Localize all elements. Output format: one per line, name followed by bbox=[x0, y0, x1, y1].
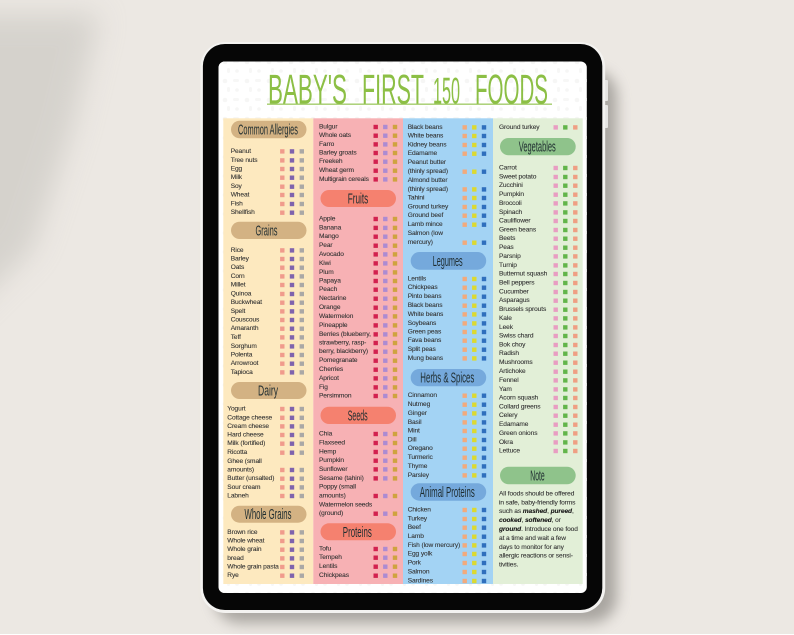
heading: herbs and spices: Herbs & Spices bbox=[420, 371, 474, 387]
heading: common allergies: Common Allergies bbox=[238, 122, 298, 138]
list: nuts and meats: Tahini bbox=[408, 194, 425, 202]
list: grains continued: Farro bbox=[319, 141, 335, 148]
heading: animal proteins bbox=[411, 483, 486, 501]
list: animal proteins: Beef bbox=[408, 524, 421, 531]
list: animal proteins bbox=[408, 506, 486, 584]
list: vegetables: Carrot bbox=[499, 164, 517, 172]
list: nuts and meats: Black beans bbox=[408, 124, 443, 131]
list: proteins bbox=[319, 546, 397, 579]
list: fruits: Papaya bbox=[319, 278, 341, 284]
list: dairy: Butter (unsalted) bbox=[227, 475, 274, 482]
list: animal proteins: Egg yolk bbox=[408, 550, 433, 558]
note text: in safe, baby-friendly forms bbox=[499, 500, 576, 506]
list: common allergies: Wheat bbox=[231, 192, 250, 198]
list: herbs and spices: Oregano bbox=[408, 445, 433, 452]
list: grains: Corn bbox=[231, 273, 245, 280]
list: legumes: Green peas bbox=[408, 328, 442, 336]
list: fruits: Avocado bbox=[319, 251, 344, 258]
list: nuts and meats: Edamame bbox=[408, 150, 437, 157]
heading: dairy: Dairy bbox=[258, 384, 278, 400]
title bbox=[267, 66, 552, 113]
list: vegetables: Lettuce bbox=[499, 448, 520, 454]
list: common allergies: Tree nuts bbox=[231, 157, 258, 164]
list: nuts and meats: (thinly spread) bbox=[408, 168, 448, 175]
list: grains continued: Whole oats bbox=[319, 132, 352, 139]
list: proteins: Tempeh bbox=[319, 554, 342, 561]
list: nuts and meats bbox=[408, 124, 486, 246]
list: common allergies bbox=[231, 148, 304, 216]
list: dairy: Ghee (small bbox=[227, 458, 262, 465]
list: dairy: Cream cheese bbox=[227, 423, 269, 430]
tablet screen bbox=[218, 62, 587, 593]
list: dairy: Ricotta bbox=[227, 449, 248, 456]
note text: allergic reactions or sensi- bbox=[499, 553, 573, 560]
list: herbs and spices: Ginger bbox=[408, 410, 428, 417]
heading: herbs and spices bbox=[411, 369, 486, 387]
list: vegetables: Green onions bbox=[499, 430, 538, 437]
list: common allergies: Shellfish bbox=[231, 209, 255, 216]
list: grains continued: Barley groats bbox=[319, 150, 357, 156]
heading: grains bbox=[231, 222, 306, 239]
list: legumes: Pinto beans bbox=[408, 293, 442, 300]
list: dairy: Labneh bbox=[227, 492, 249, 500]
list: vegetables: Cauliflower bbox=[499, 218, 531, 224]
title: 150 bbox=[433, 71, 460, 112]
list: dairy: Sour cream bbox=[227, 484, 261, 491]
list: legumes: Fava beans bbox=[408, 337, 442, 344]
list: nuts and meats: mercury) bbox=[408, 239, 433, 246]
heading: common allergies bbox=[231, 121, 306, 138]
list: nuts and meats: Almond butter bbox=[408, 177, 448, 184]
list: herbs and spices: Mint bbox=[408, 428, 420, 434]
list: fruits: Apricot bbox=[319, 375, 339, 382]
heading: proteins bbox=[320, 523, 396, 541]
list: vegetables: Bell peppers bbox=[499, 280, 535, 286]
list: nuts and meats: Kidney beans bbox=[408, 142, 447, 148]
list: whole grains: Whole grain bbox=[227, 546, 262, 553]
heading: fruits: Fruits bbox=[348, 192, 368, 208]
heading: grains: Grains bbox=[256, 223, 278, 239]
list: grains bbox=[231, 247, 304, 376]
list: herbs and spices: Basil bbox=[408, 419, 422, 426]
list: vegetables: Celery bbox=[499, 412, 518, 419]
list: common allergies: Peanut bbox=[231, 148, 251, 155]
panel: green column bbox=[493, 118, 583, 584]
list: seeds: Sesame (tahini) bbox=[319, 475, 364, 482]
list: fruits: Orange bbox=[319, 304, 341, 311]
heading: legumes bbox=[411, 252, 486, 270]
list: vegetables: Beets bbox=[499, 235, 516, 242]
list: whole grains: Rye bbox=[227, 572, 239, 579]
heading: fruits bbox=[320, 190, 396, 208]
list: vegetables: Cucumber bbox=[499, 288, 530, 296]
list: legumes bbox=[408, 276, 486, 362]
list: herbs and spices: Parsley bbox=[408, 472, 430, 479]
heading: whole grains: Whole Grains bbox=[244, 507, 292, 523]
note text: ground. Introduce one food bbox=[498, 526, 578, 533]
heading: legumes: Legumes bbox=[433, 254, 463, 270]
list: vegetables: Turnip bbox=[499, 262, 517, 269]
list: animal proteins: Pork bbox=[408, 560, 422, 566]
list: fruits: strawberry, rasp- bbox=[319, 340, 366, 346]
list: nuts and meats: Lamb mince bbox=[408, 221, 443, 228]
list: vegetables: Edamame bbox=[499, 421, 529, 428]
list: animal proteins: Lamb bbox=[408, 533, 424, 540]
list: animal proteins: Salmon bbox=[408, 568, 430, 576]
list: nuts and meats: Peanut butter bbox=[408, 159, 447, 166]
list: grains: Millet bbox=[231, 282, 246, 288]
list: seeds: Sunflower bbox=[319, 466, 348, 473]
heading: vegetables: Vegetables bbox=[519, 140, 556, 156]
list: seeds: Pumpkin bbox=[319, 457, 344, 464]
list: vegetables: Swiss chard bbox=[499, 332, 534, 340]
list: fruits: Berries (blueberry, bbox=[319, 331, 371, 338]
list: common allergies: Fish bbox=[231, 200, 243, 208]
list: herbs and spices bbox=[408, 392, 486, 479]
heading: proteins: Proteins bbox=[343, 525, 372, 541]
list: fruits: Peach bbox=[319, 286, 338, 293]
list: animal proteins: Sardines bbox=[408, 578, 434, 584]
list: proteins: Tofu bbox=[319, 546, 331, 552]
list: fruits: Pear bbox=[319, 242, 333, 249]
list: legumes: Soybeans bbox=[408, 320, 437, 327]
list: seeds: Hemp bbox=[319, 448, 337, 456]
list: grains continued: Wheat germ bbox=[319, 167, 355, 174]
list: nuts and meats: White beans bbox=[408, 132, 444, 140]
list: fruits: Pineapple bbox=[319, 322, 348, 329]
list: seeds: Poppy (small bbox=[319, 484, 357, 490]
tablet body bbox=[200, 42, 605, 613]
note text: tivities. bbox=[499, 562, 519, 568]
list: vegetables: Brussels sprouts bbox=[499, 306, 547, 313]
list: legumes: Lentils bbox=[408, 276, 427, 282]
heading: note: Note bbox=[530, 468, 545, 484]
list: legumes: Black beans bbox=[408, 302, 443, 309]
note text: such as mashed, pureed, bbox=[499, 508, 574, 515]
list: grains: Buckwheat bbox=[231, 299, 262, 306]
list: grains: Couscous bbox=[231, 316, 260, 324]
list: proteins continued: Ground turkey bbox=[499, 124, 540, 131]
list: nuts and meats: Ground turkey bbox=[408, 204, 449, 210]
panel: yellow column bbox=[223, 118, 313, 584]
list: vegetables: Yam bbox=[499, 386, 512, 393]
tablet side buttons bbox=[603, 80, 608, 128]
list: grains: Quinoa bbox=[231, 290, 252, 298]
list: whole grains: Brown rice bbox=[227, 529, 258, 536]
list: grains: Arrowroot bbox=[231, 360, 259, 367]
list: vegetables: Sweet potato bbox=[499, 174, 537, 180]
list: grains: Polenta bbox=[231, 352, 253, 358]
list: fruits: berry, blackberry) bbox=[319, 348, 368, 355]
list: vegetables: Collard greens bbox=[499, 404, 541, 410]
list: grains: Barley bbox=[231, 256, 250, 262]
list: nuts and meats: Salmon (low bbox=[408, 230, 443, 237]
list: fruits: Watermelon bbox=[319, 313, 354, 320]
background shadow patch bbox=[0, 14, 100, 320]
list: vegetables: Leek bbox=[499, 324, 514, 331]
title: FOODS bbox=[475, 66, 548, 113]
list: grains: Sorghum bbox=[231, 343, 257, 350]
list: vegetables: Mushrooms bbox=[499, 359, 533, 366]
list: animal proteins: Chicken bbox=[408, 506, 431, 514]
list: seeds bbox=[319, 430, 397, 517]
list: grains: Spelt bbox=[231, 308, 245, 315]
heading: seeds bbox=[320, 407, 396, 424]
heading: dairy bbox=[231, 382, 306, 400]
list: fruits: Apple bbox=[319, 216, 336, 222]
list: grains continued: Multigrain cereals bbox=[319, 176, 370, 183]
list: vegetables bbox=[499, 164, 578, 454]
list: proteins: Chickpeas bbox=[319, 572, 350, 579]
note text: All foods should be offered bbox=[499, 490, 575, 498]
list: seeds: (ground) bbox=[319, 510, 343, 517]
list: grains continued bbox=[319, 124, 397, 183]
list: whole grains: bread bbox=[227, 555, 244, 562]
list: nuts and meats: (thinly spread) bbox=[408, 186, 448, 193]
list: vegetables: Asparagus bbox=[499, 297, 530, 304]
list: fruits: Persimmon bbox=[319, 392, 352, 400]
list: fruits: Mango bbox=[319, 233, 339, 240]
list: fruits bbox=[319, 216, 397, 400]
list: grains continued: Bulgur bbox=[319, 124, 338, 130]
list: herbs and spices: Cinnamon bbox=[408, 392, 437, 399]
list: dairy: amounts) bbox=[227, 466, 254, 474]
tablet shadow bbox=[214, 70, 617, 623]
list: vegetables: Artichoke bbox=[499, 368, 526, 375]
list: vegetables: Radish bbox=[499, 350, 519, 357]
heading: note bbox=[500, 467, 576, 484]
list: fruits: Cherries bbox=[319, 366, 344, 373]
list: dairy: Hard cheese bbox=[227, 432, 264, 438]
list: common allergies: Egg bbox=[231, 166, 243, 172]
list: fruits: Nectarine bbox=[319, 295, 347, 302]
note text: days to monitor for any bbox=[499, 544, 565, 551]
list: vegetables: Butternut squash bbox=[499, 270, 548, 278]
list: common allergies: Milk bbox=[231, 174, 243, 181]
list: vegetables: Bok choy bbox=[499, 342, 526, 348]
heading: whole grains bbox=[231, 506, 306, 523]
list: legumes: White beans bbox=[408, 311, 444, 318]
list: fruits: Fig bbox=[319, 384, 328, 391]
list: fruits: Pomegranate bbox=[319, 357, 358, 364]
heading: vegetables bbox=[500, 138, 576, 156]
list: herbs and spices: Dill bbox=[408, 436, 417, 444]
list: dairy: Yogurt bbox=[227, 406, 246, 412]
list: seeds: Watermelon seeds bbox=[319, 502, 373, 508]
list: animal proteins: Fish (low mercury) bbox=[408, 542, 460, 549]
heading: animal proteins: Animal Proteins bbox=[420, 485, 475, 501]
list: grains: Teff bbox=[231, 334, 241, 341]
list: nuts and meats: Ground beef bbox=[408, 212, 444, 219]
list: dairy: Milk (fortified) bbox=[227, 440, 265, 447]
list: vegetables: Pumpkin bbox=[499, 191, 524, 198]
list: legumes: Mung beans bbox=[408, 355, 444, 362]
list: proteins continued bbox=[499, 124, 578, 131]
list: proteins: Lentils bbox=[319, 563, 338, 570]
list: fruits: Kiwi bbox=[319, 260, 331, 267]
list: vegetables: Broccoli bbox=[499, 200, 522, 207]
list: vegetables: Green beans bbox=[499, 226, 537, 234]
list: fruits: Banana bbox=[319, 224, 342, 231]
list: vegetables: Fennel bbox=[499, 377, 519, 384]
list: vegetables: Okra bbox=[499, 439, 513, 446]
list: whole grains: Whole wheat bbox=[227, 538, 265, 544]
list: seeds: Chia bbox=[319, 430, 333, 438]
list: vegetables: Zucchini bbox=[499, 182, 523, 189]
list: dairy bbox=[227, 406, 304, 500]
list: grains: Rice bbox=[231, 247, 244, 254]
list: herbs and spices: Nutmeg bbox=[408, 401, 431, 408]
panel: pink column bbox=[313, 118, 403, 584]
list: legumes: Chickpeas bbox=[408, 284, 438, 291]
title: FIRST bbox=[362, 66, 424, 113]
list: herbs and spices: Turmeric bbox=[408, 454, 433, 461]
list: common allergies: Soy bbox=[231, 183, 243, 190]
list: whole grains bbox=[227, 529, 304, 579]
title: BABY'S bbox=[268, 66, 347, 113]
list: vegetables: Acorn squash bbox=[499, 394, 539, 402]
list: dairy: Cottage cheese bbox=[227, 414, 273, 421]
panel: blue column bbox=[403, 118, 493, 585]
heading: seeds: Seeds bbox=[348, 408, 368, 424]
list: whole grains: Whole grain pasta bbox=[227, 564, 279, 570]
list: legumes: Split peas bbox=[408, 346, 436, 353]
list: grains: Tapioca bbox=[231, 369, 253, 376]
list: vegetables: Parsnip bbox=[499, 253, 521, 260]
list: grains: Amaranth bbox=[231, 325, 259, 332]
list: fruits: Plum bbox=[319, 269, 334, 276]
list: vegetables: Spinach bbox=[499, 209, 523, 216]
list: vegetables: Kale bbox=[499, 315, 512, 322]
list: vegetables: Peas bbox=[499, 244, 514, 251]
list: grains: Oats bbox=[231, 264, 245, 271]
list: herbs and spices: Thyme bbox=[408, 463, 428, 470]
list: animal proteins: Turkey bbox=[408, 516, 428, 522]
list: seeds: Flaxseed bbox=[319, 440, 345, 446]
note text: cooked, softened, or bbox=[499, 517, 562, 524]
list: seeds: amounts) bbox=[319, 492, 346, 500]
note text bbox=[498, 490, 578, 568]
list: grains continued: Freekeh bbox=[319, 158, 343, 165]
note text: at a time and wait a few bbox=[499, 535, 566, 542]
